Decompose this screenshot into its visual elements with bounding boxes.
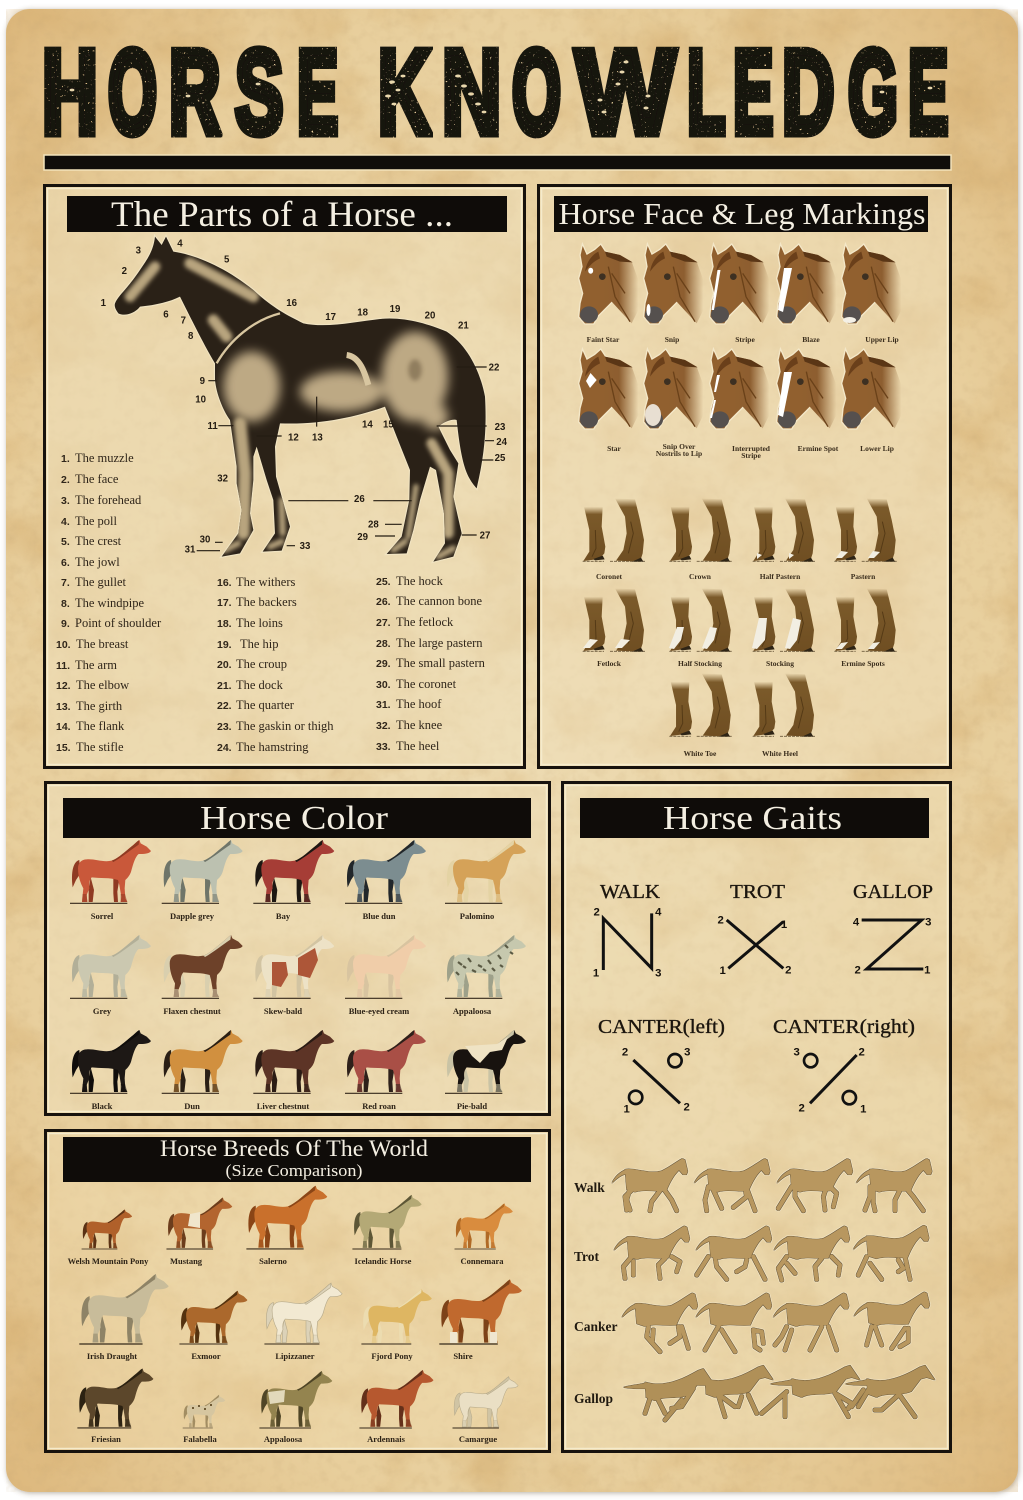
color: Pie-bald: Pie-bald xyxy=(457,1101,487,1111)
part numbers: 26 xyxy=(354,494,365,505)
title: D xyxy=(782,26,834,159)
face marking: Snip: Snip xyxy=(665,335,679,344)
parts list column 1: The forehead xyxy=(75,493,142,507)
title: L xyxy=(687,26,726,159)
parts list column 3: 33. xyxy=(376,741,391,753)
part numbers: 9 xyxy=(200,376,206,387)
gait row: trot xyxy=(574,1225,929,1280)
title: O xyxy=(512,26,561,159)
breed: Icelandic Horse: Icelandic Horse xyxy=(355,1256,412,1266)
leg marking: Ermine Spots: Ermine Spots xyxy=(841,659,885,668)
parts list column 3: The knee xyxy=(396,718,443,732)
breed: Camargue xyxy=(452,1377,518,1444)
color: Flaxen chestnut xyxy=(162,935,243,1016)
part numbers: 14 xyxy=(362,419,373,430)
color: Sorrel: Sorrel xyxy=(91,911,114,921)
face marking: Snip Over Nostrils to Lip: Nostrils to Lip xyxy=(656,449,702,458)
breed: Fjord Pony: Fjord Pony xyxy=(371,1351,413,1361)
part numbers: 2 xyxy=(122,266,127,277)
color: Skew-bald: Skew-bald xyxy=(264,1006,302,1016)
color: Black: Black xyxy=(92,1101,113,1111)
breed: Irish Draught xyxy=(79,1274,169,1361)
breed: Camargue: Camargue xyxy=(459,1434,497,1444)
gait row: walk: Walk xyxy=(574,1180,605,1195)
title: W xyxy=(576,26,675,159)
gait pattern: gallop: 2 xyxy=(855,964,861,976)
face marking: Blaze: Blaze xyxy=(802,335,820,344)
gait pattern: canter right: 1 xyxy=(860,1103,866,1115)
color: Grey xyxy=(70,935,151,1016)
parts list column 2: 22. xyxy=(217,700,232,712)
parts list column 1: 2. xyxy=(61,474,70,486)
leg marking: Pastern: Pastern xyxy=(851,572,876,581)
parts list column 1: 4. xyxy=(61,516,70,528)
gait pattern: trot xyxy=(718,881,791,977)
parts list column 3: The heel xyxy=(396,739,440,753)
part numbers: 19 xyxy=(390,304,401,315)
gait pattern: trot: 1 xyxy=(781,919,787,931)
color: Bay: Bay xyxy=(276,911,291,921)
parts list column 2: The quarter xyxy=(236,698,295,712)
parts list column 1 xyxy=(56,451,162,754)
parts list column 1: 15. xyxy=(56,742,71,754)
leg marking: Fetlock xyxy=(583,588,645,668)
part numbers: 21 xyxy=(458,321,469,332)
gait pattern: canter left: 3 xyxy=(684,1047,690,1059)
color: Blue dun xyxy=(345,840,426,921)
parts list column 2: 24. xyxy=(217,742,232,754)
part numbers: 10 xyxy=(195,394,206,405)
part numbers: 32 xyxy=(217,474,228,485)
gait pattern: gallop: GALLOP xyxy=(853,881,933,903)
gait pattern: canter right: 3 xyxy=(794,1047,800,1059)
face marking: Stripe xyxy=(710,245,769,344)
parts list column 3: 26. xyxy=(376,596,391,608)
breed: Salerno: Salerno xyxy=(259,1256,287,1266)
leg marking: White Toe xyxy=(669,673,732,758)
panel heading: Horse Breeds Of The World xyxy=(160,1136,428,1162)
face marking: Blaze xyxy=(777,245,836,344)
panel heading xyxy=(63,1136,531,1182)
color: Red roan xyxy=(345,1030,426,1111)
color: Sorrel xyxy=(70,840,151,921)
parts list column 3: 28. xyxy=(376,638,391,650)
parts list column 3: The large pastern xyxy=(396,636,483,650)
panel heading xyxy=(63,798,531,838)
parts list column 1: The poll xyxy=(75,514,118,528)
color: Pie-bald xyxy=(445,1030,526,1111)
gait pattern: canter right: 2 xyxy=(859,1047,865,1059)
gait pattern: trot: 2 xyxy=(785,964,791,976)
gait pattern: walk xyxy=(593,881,662,980)
gait pattern: gallop xyxy=(853,881,933,976)
parts list column 1: 9. xyxy=(61,618,70,630)
parts list column 1: 13. xyxy=(56,701,71,713)
gait pattern: walk: 3 xyxy=(655,968,661,980)
breed: Falabella: Falabella xyxy=(183,1434,218,1444)
breed: Friesian xyxy=(77,1368,153,1444)
gait row: walk xyxy=(574,1159,932,1211)
color: Liver chestnut xyxy=(253,1030,334,1111)
parts list column 3: The cannon bone xyxy=(396,594,483,608)
parts list column 2: 23. xyxy=(217,721,232,733)
color: Blue-eyed cream xyxy=(345,935,426,1016)
title: E xyxy=(297,26,338,159)
gait row: trot: Trot xyxy=(574,1249,600,1264)
part numbers: 8 xyxy=(188,331,194,342)
breed: Salerno xyxy=(246,1186,327,1266)
part numbers: 11 xyxy=(208,421,218,432)
part numbers: 13 xyxy=(312,433,323,444)
panel: the parts of a horse xyxy=(44,186,524,768)
parts list column 1: 14. xyxy=(56,721,71,733)
parts list column 1: The crest xyxy=(75,534,122,548)
parts list column 3: 32. xyxy=(376,720,391,732)
gait pattern: canter left: 2 xyxy=(684,1102,690,1114)
gait row: canker xyxy=(574,1292,930,1352)
parts list column 1: The windpipe xyxy=(75,596,145,610)
panel heading: Horse Color xyxy=(200,800,389,837)
parts list column 1: The muzzle xyxy=(75,451,134,465)
breed: Welsh Mountain Pony: Welsh Mountain Pony xyxy=(68,1256,149,1266)
color: Dapple grey: Dapple grey xyxy=(170,911,215,921)
leg marking: Half Stocking xyxy=(669,588,732,668)
leg marking: Coronet: Coronet xyxy=(596,572,623,581)
breed: Ardennais: Ardennais xyxy=(367,1434,406,1444)
face marking: Snip Over Nostrils to Lip: Snip Over xyxy=(663,442,696,451)
parts list column 2: The croup xyxy=(236,657,287,671)
gait pattern: canter left: 2 xyxy=(622,1047,628,1059)
parts list column 1: The breast xyxy=(76,637,129,651)
title: H xyxy=(42,26,97,159)
breed: Mustang: Mustang xyxy=(170,1256,203,1266)
face marking: Interrupted Stripe xyxy=(710,350,771,460)
parts list column 1: 10. xyxy=(56,639,71,651)
parts list column 2: The loins xyxy=(236,616,283,630)
color: Blue dun: Blue dun xyxy=(363,911,396,921)
leg marking: White Toe: White Toe xyxy=(684,749,717,758)
title xyxy=(42,26,948,159)
parts list column 3: The hock xyxy=(396,574,444,588)
parts list column 1: The flank xyxy=(76,719,125,733)
leg marking: Half Stocking: Half Stocking xyxy=(678,659,722,668)
panel: face and leg markings xyxy=(538,186,950,768)
parts list column 2: 20. xyxy=(217,659,232,671)
part numbers: 3 xyxy=(136,245,142,256)
gait pattern: canter left: 1 xyxy=(624,1103,630,1115)
part numbers: 1 xyxy=(101,298,107,309)
part numbers: 15 xyxy=(383,419,394,430)
parts list column 2: 17. xyxy=(217,597,232,609)
leg marking: Crown xyxy=(669,498,732,581)
breed: Falabella xyxy=(183,1395,225,1444)
color: Grey: Grey xyxy=(93,1006,112,1016)
part numbers: 30 xyxy=(200,534,210,545)
face marking: Lower Lip: Lower Lip xyxy=(860,444,894,453)
color: Blue-eyed cream: Blue-eyed cream xyxy=(349,1006,409,1016)
part numbers: 7 xyxy=(181,315,186,326)
parts list column 2: The hip xyxy=(240,637,279,651)
panel heading: The Parts of a Horse ... xyxy=(111,194,453,234)
breed: Shire: Shire xyxy=(453,1351,473,1361)
gait pattern: walk: WALK xyxy=(600,881,661,903)
panel heading: Horse Face & Leg Markings xyxy=(558,196,926,231)
parts list column 2: 16. xyxy=(217,577,232,589)
part numbers: 25 xyxy=(495,453,506,464)
part numbers: 33 xyxy=(300,541,311,552)
part numbers: 18 xyxy=(357,307,369,318)
parts list column 1: 5. xyxy=(61,536,70,548)
color: Appaloosa: Appaloosa xyxy=(453,1006,492,1016)
panel: horse breeds of the world xyxy=(46,1130,550,1452)
parts list column 1: The arm xyxy=(75,658,117,672)
face marking: Upper Lip: Upper Lip xyxy=(865,335,899,344)
parts list column 2 xyxy=(217,575,334,754)
panel heading: Horse Gaits xyxy=(663,800,842,837)
face marking: Star xyxy=(579,350,638,453)
part numbers: 28 xyxy=(368,520,379,531)
parts list column 1: 8. xyxy=(61,598,70,610)
part numbers xyxy=(101,238,508,555)
title: K xyxy=(378,26,430,159)
color: Flaxen chestnut: Flaxen chestnut xyxy=(163,1006,221,1016)
gait pattern: canter right xyxy=(773,1016,915,1115)
color: Appaloosa xyxy=(445,935,526,1016)
breed: Lipizzaner xyxy=(264,1283,342,1361)
gait pattern: gallop: 1 xyxy=(924,964,930,976)
part numbers: 29 xyxy=(357,532,369,543)
face marking: Ermine Spot xyxy=(777,350,839,453)
color: Skew-bald xyxy=(253,935,334,1016)
parts list column 1: The gullet xyxy=(75,575,127,589)
leg marking: Pastern xyxy=(834,498,897,581)
parts list column 2: The dock xyxy=(236,678,284,692)
breed: Ardennais xyxy=(359,1370,434,1444)
leg marking: Crown: Crown xyxy=(689,572,712,581)
part numbers: 16 xyxy=(286,298,298,309)
gait pattern: trot: TROT xyxy=(730,881,785,903)
part numbers: 27 xyxy=(480,530,490,541)
gait row: gallop: Gallop xyxy=(574,1391,613,1406)
color: Liver chestnut: Liver chestnut xyxy=(257,1101,309,1111)
face marking: Snip xyxy=(644,245,703,344)
parts list column 2: The hamstring xyxy=(236,740,309,754)
title: E xyxy=(908,26,948,159)
part numbers: 6 xyxy=(163,309,169,320)
parts list column 1: 12. xyxy=(56,680,71,692)
leg marking: White Heel: White Heel xyxy=(762,749,798,758)
panel: horse color xyxy=(46,782,550,1114)
breed: Exmoor xyxy=(179,1291,247,1361)
parts list column 1: The elbow xyxy=(76,678,129,692)
color: Black xyxy=(70,1030,151,1111)
leg marking: Half Pastern xyxy=(753,498,815,581)
leg marking: White Heel xyxy=(753,673,815,758)
color: Bay xyxy=(253,840,334,921)
gait pattern: walk: 2 xyxy=(594,907,600,919)
part numbers: 31 xyxy=(185,544,196,555)
face marking: Stripe: Stripe xyxy=(735,335,755,344)
gait pattern: trot: 2 xyxy=(718,914,724,926)
part numbers: 22 xyxy=(489,362,499,373)
parts list column 3: 27. xyxy=(376,617,391,629)
parts list column 1: 6. xyxy=(61,557,70,569)
breed: Shire xyxy=(439,1279,522,1361)
parts list column 1: Point of shoulder xyxy=(75,616,162,630)
title: G xyxy=(848,26,898,159)
face marking: Faint Star: Faint Star xyxy=(587,335,620,344)
parts list column 3: 29. xyxy=(376,658,391,670)
gait pattern: canter left xyxy=(598,1016,725,1115)
breed: Connemara xyxy=(454,1203,513,1266)
title: O xyxy=(108,26,157,159)
parts list column 1: 7. xyxy=(61,577,70,589)
title rule xyxy=(44,155,951,170)
face marking: Star: Star xyxy=(607,444,622,453)
breed: Icelandic Horse xyxy=(352,1195,422,1266)
breed: Exmoor: Exmoor xyxy=(191,1351,221,1361)
parts list column 3: 25. xyxy=(376,576,391,588)
labelled horse anatomy diagram xyxy=(101,237,508,562)
panel: horse gaits xyxy=(562,782,950,1452)
color: Palomino xyxy=(445,840,526,921)
title: S xyxy=(235,26,283,159)
parts list column 3: The small pastern xyxy=(396,656,486,670)
gait row: gallop xyxy=(574,1365,935,1420)
breed: Mustang xyxy=(166,1198,232,1266)
panel heading xyxy=(580,798,929,838)
panel heading: (Size Comparison) xyxy=(226,1161,362,1180)
title: E xyxy=(733,26,773,159)
part numbers: 4 xyxy=(177,238,183,249)
parts list column 2: 21. xyxy=(217,680,232,692)
face marking: Faint Star xyxy=(579,245,638,344)
gait pattern: walk: 1 xyxy=(593,968,599,980)
breed: Fjord Pony xyxy=(361,1289,432,1361)
callout lines xyxy=(197,367,494,551)
color: Dapple grey xyxy=(162,840,243,921)
part numbers: 23 xyxy=(495,422,506,433)
leg marking: Stocking: Stocking xyxy=(766,659,794,668)
gait pattern: walk: 4 xyxy=(655,907,662,919)
parts list column 1: The stifle xyxy=(76,740,124,754)
part numbers: 17 xyxy=(325,312,336,323)
gait pattern: canter left: CANTER(left) xyxy=(598,1016,725,1038)
gait pattern: canter right: CANTER(right) xyxy=(773,1016,915,1038)
breed: Friesian: Friesian xyxy=(91,1434,121,1444)
breed: Welsh Mountain Pony xyxy=(68,1209,149,1266)
parts list column 3: The hoof xyxy=(396,697,442,711)
face marking: Lower Lip xyxy=(842,350,901,453)
parts list column 2: The gaskin or thigh xyxy=(236,719,334,733)
face marking: Snip Over Nostrils to Lip xyxy=(644,350,703,458)
breed: Irish Draught: Irish Draught xyxy=(87,1351,137,1361)
gait pattern: canter right: 2 xyxy=(799,1102,805,1114)
face marking: Ermine Spot: Ermine Spot xyxy=(798,444,839,453)
leg marking: Coronet xyxy=(583,498,645,581)
leg marking: Half Pastern: Half Pastern xyxy=(760,572,801,581)
parts list column 1: The jowl xyxy=(75,555,120,569)
title: N xyxy=(442,26,502,159)
leg marking: Fetlock: Fetlock xyxy=(597,659,622,668)
color: Palomino: Palomino xyxy=(460,911,494,921)
part numbers: 20 xyxy=(425,310,435,321)
parts list column 2: The backers xyxy=(236,595,297,609)
breed: Connemara: Connemara xyxy=(461,1256,504,1266)
gait row: canker: Canker xyxy=(574,1319,618,1334)
leg marking: Stocking xyxy=(752,588,815,668)
parts list column 3: The coronet xyxy=(396,677,457,691)
parts list column 1: 11. xyxy=(56,660,70,672)
face marking: Interrupted Stripe: Interrupted xyxy=(732,444,771,453)
gait pattern: gallop: 4 xyxy=(853,917,860,929)
parts list column 3: 30. xyxy=(376,679,391,691)
gait pattern: gallop: 3 xyxy=(925,917,931,929)
horse figure xyxy=(115,237,486,562)
face marking: Interrupted Stripe: Stripe xyxy=(741,451,761,460)
title: R xyxy=(169,26,220,159)
gait pattern: trot: 1 xyxy=(720,965,726,977)
color: Red roan: Red roan xyxy=(362,1101,396,1111)
color: Dun xyxy=(162,1030,243,1111)
part numbers: 5 xyxy=(224,255,230,266)
parts list column 1: The face xyxy=(75,472,119,486)
breed: Lipizzaner: Lipizzaner xyxy=(275,1351,315,1361)
parts list column 3 xyxy=(376,574,486,753)
parts list column 2: 19. xyxy=(217,639,232,651)
parts list column 1: 3. xyxy=(61,495,70,507)
parts list column 3: The fetlock xyxy=(396,615,454,629)
color: Dun: Dun xyxy=(184,1101,200,1111)
parts list column 3: 31. xyxy=(376,699,391,711)
part numbers: 12 xyxy=(288,433,299,444)
part numbers: 24 xyxy=(496,437,508,448)
breed: Appaloosa: Appaloosa xyxy=(264,1434,303,1444)
parts list column 1: 1. xyxy=(61,453,70,465)
leg marking: Ermine Spots xyxy=(834,588,897,668)
face marking: Upper Lip xyxy=(842,245,901,344)
parts list column 2: The withers xyxy=(236,575,295,589)
breed: Appaloosa xyxy=(259,1371,332,1444)
parts list column 1: The girth xyxy=(76,699,123,713)
parts list column 2: 18. xyxy=(217,618,232,630)
